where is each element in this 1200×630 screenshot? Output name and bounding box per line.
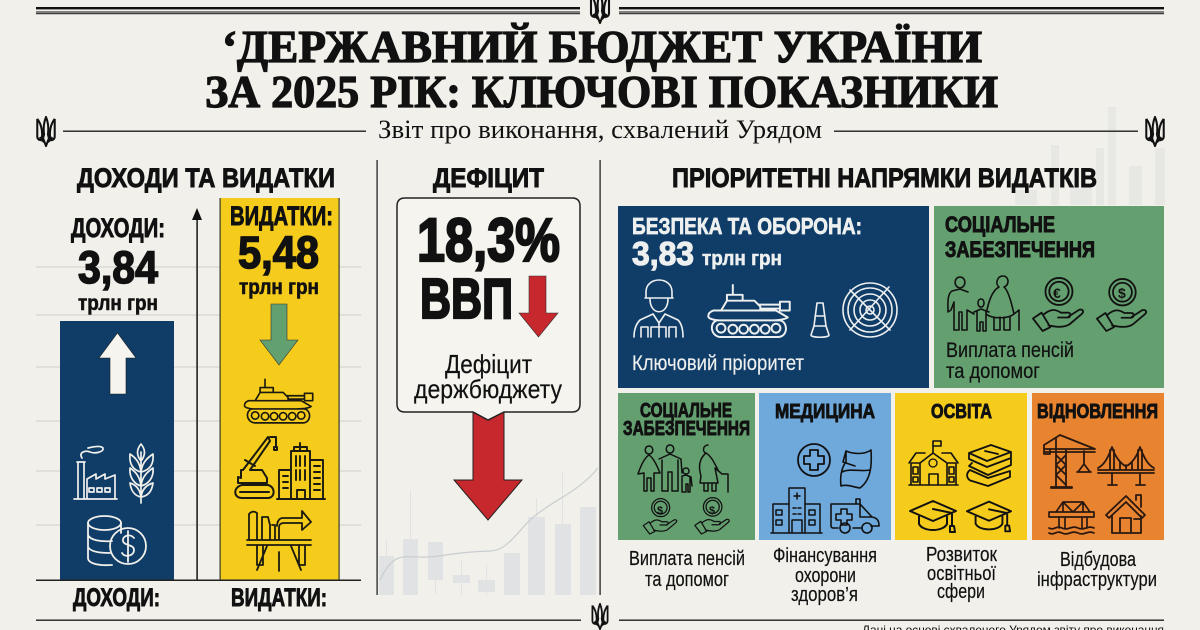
caption: medicine — [773, 545, 877, 606]
icon: family and elder — [638, 445, 728, 492]
icon: factory — [74, 446, 117, 499]
bar: expenses — [220, 198, 340, 580]
icon: hand with dollar: $ — [657, 505, 663, 517]
panel: medicine — [759, 393, 891, 540]
icon: house — [1106, 495, 1145, 533]
arrow: expenses down — [260, 304, 298, 365]
deficit callout: Дефіцит — [445, 349, 532, 379]
icon: tower crane — [1044, 435, 1095, 488]
faint chart top right — [1015, 107, 1165, 205]
caption: recovery: інфраструктури — [1037, 569, 1157, 591]
icon: cone — [811, 303, 829, 337]
panel: social security large: СОЦІАЛЬНЕ — [945, 212, 1055, 237]
icon: tank — [244, 379, 313, 423]
caption: medicine: Фінансування — [773, 545, 877, 567]
icon: hand with dollar: $ — [1118, 285, 1126, 301]
icon: hand with dollar — [1097, 279, 1146, 331]
panel: social security small: СОЦІАЛЬНЕ — [640, 400, 732, 422]
panel: education — [895, 393, 1027, 540]
icon: trident left — [37, 117, 55, 146]
icon: graduation cap — [910, 501, 956, 532]
icon: hand with coin — [695, 498, 729, 534]
deficit callout — [397, 198, 580, 420]
icon: mask — [841, 450, 871, 488]
title — [205, 21, 998, 117]
faint chart behind deficit — [379, 468, 598, 595]
panel: recovery — [1032, 393, 1164, 540]
icon: clock face — [929, 459, 937, 467]
panel: security and defence: Ключовий пріоритет — [632, 352, 804, 375]
deficit callout: ВВП — [420, 267, 513, 331]
icon: hand with dollar — [643, 499, 677, 534]
caption: social security — [629, 548, 745, 591]
heading: deficit: ДЕФІЦИТ — [433, 163, 544, 193]
icon: coins — [88, 516, 146, 565]
panel: social security small — [618, 393, 755, 540]
icon: hand with coin: $ — [709, 505, 715, 517]
caption: education — [926, 544, 997, 603]
caption: recovery — [1037, 549, 1157, 591]
icon: buildings — [277, 443, 325, 499]
title: ЗА 2025 РІК: КЛЮЧОВІ ПОКАЗНИКИ — [205, 66, 998, 117]
icon: road and pipes — [247, 511, 311, 571]
caption: medicine: охорони — [795, 565, 856, 587]
caption: social security: та допомог — [645, 569, 729, 591]
caption: education: освітньої — [927, 563, 996, 585]
panel: security and defence: 3,83 — [632, 235, 694, 272]
icon: books — [967, 445, 1011, 486]
panel: social security large: та допомог — [946, 360, 1040, 383]
heading: priority directions: ПРІОРИТЕТНІ НАПРЯМКИ ВИДАТКІВ — [672, 163, 1097, 193]
panel: social security large — [934, 206, 1164, 388]
icon: soldier — [634, 280, 683, 337]
panel: social security small: ЗАБЕЗПЕЧЕННЯ — [623, 418, 750, 440]
deficit callout: держбюджету — [414, 374, 562, 404]
icon: hospital — [771, 488, 822, 533]
top rule right — [619, 7, 1164, 14]
panel: security and defence: трлн грн — [702, 248, 782, 270]
caption: medicine: здоров’я — [791, 584, 858, 606]
caption: social security: Виплата пенсій — [629, 548, 745, 570]
panel: social security large: Виплата пенсій — [946, 339, 1074, 362]
revenue value — [71, 213, 165, 315]
title: ‘ДЕРЖАВНИЙ БЮДЖЕТ УКРАЇНИ — [222, 21, 982, 72]
small red arrow — [519, 276, 558, 337]
bottom rules — [36, 620, 1164, 621]
bar label: revenue: ДОХОДИ: — [73, 584, 160, 612]
panel: security and defence — [618, 206, 929, 388]
icon: crane — [235, 437, 277, 498]
caption: education: Розвиток — [926, 544, 997, 566]
caption: recovery: Відбудова — [1060, 549, 1137, 571]
icon: ambulance — [831, 499, 879, 533]
icon: hand with euro: € — [1053, 285, 1061, 301]
icon: hand with euro — [1033, 278, 1083, 331]
panel: medicine: МЕДИЦИНА — [775, 401, 875, 423]
icon: trident right — [1146, 117, 1164, 146]
icon: wheat — [130, 444, 153, 503]
panel: social security large: ЗАБЕЗПЕЧЕННЯ — [945, 237, 1095, 262]
bar label: expenses: ВИДАТКИ: — [231, 584, 327, 612]
caption: education: сфери — [937, 581, 985, 603]
top rule left — [36, 7, 580, 14]
subtitle rules — [63, 130, 1138, 132]
icon: medical cross — [798, 444, 830, 476]
expenses value: 5,48 — [238, 227, 319, 278]
heading: revenue and expenses: ДОХОДИ ТА ВИДАТКИ — [77, 163, 335, 193]
bar: revenue — [60, 321, 174, 580]
icon: tank — [708, 285, 790, 337]
icon: truss bridge — [1049, 502, 1094, 534]
deficit callout: 18,3% — [417, 206, 560, 274]
icon: target — [843, 283, 897, 337]
panel: recovery: ВІДНОВЛЕННЯ — [1037, 401, 1158, 423]
arrow: revenue up — [99, 333, 136, 394]
icon: school — [909, 441, 958, 485]
panel: security and defence: БЕЗПЕКА ТА ОБОРОНА: — [632, 213, 862, 239]
chart axis arrow — [192, 208, 202, 580]
icon: trident bottom — [592, 604, 608, 629]
baseline — [36, 580, 361, 581]
icon: suspension bridge — [1098, 447, 1154, 485]
revenue value: ДОХОДИ: — [71, 213, 165, 243]
expenses value — [230, 201, 333, 299]
subtitle: Звіт про виконання, схвалений Урядом — [378, 115, 822, 144]
expenses value: трлн грн — [239, 276, 319, 299]
panel: education: ОСВІТА — [931, 401, 992, 423]
icon: trident top — [591, 0, 609, 23]
revenue value: трлн грн — [78, 292, 158, 315]
icon: family — [948, 276, 1019, 331]
expenses value: ВИДАТКИ: — [230, 201, 333, 231]
big red arrow — [454, 411, 522, 520]
icon: graduation cap — [967, 502, 1011, 531]
revenue value: 3,84 — [78, 242, 158, 293]
